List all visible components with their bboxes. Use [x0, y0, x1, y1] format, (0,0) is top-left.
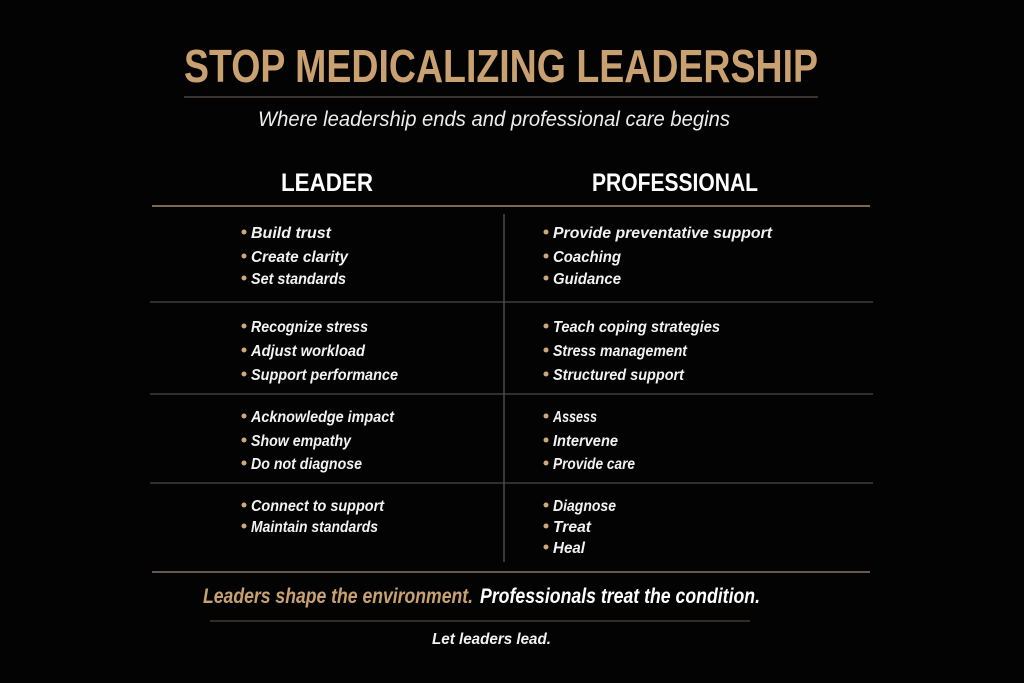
panel: professional items: Teach coping strategies [553, 319, 720, 336]
footer tagline: Let leaders lead. [432, 631, 551, 648]
panel: professional items: Diagnose [553, 498, 616, 515]
panel: professional items: Coaching [553, 249, 621, 266]
panel: leader items [242, 225, 398, 536]
panel: professional items: Treat [553, 519, 592, 536]
panel: leader items: Build trust [251, 225, 332, 242]
panel: leader items: Set standards [251, 271, 346, 288]
panel: leader items: Create clarity [251, 249, 349, 266]
heading: leader: LEADER [281, 169, 373, 197]
callout: summary quote [203, 585, 760, 608]
subtitle: Where leadership ends and professional care begins [258, 108, 730, 131]
panel: leader items: Maintain standards [251, 519, 378, 536]
heading: professional: PROFESSIONAL [592, 169, 758, 197]
panel: leader items: Show empathy [251, 433, 352, 450]
panel: professional items: Assess [552, 409, 597, 426]
callout: summary quote: Professionals treat the condition. [480, 585, 760, 608]
panel: leader items: Recognize stress [251, 319, 368, 336]
title: STOP MEDICALIZING LEADERSHIP [184, 40, 818, 92]
panel: leader items: Do not diagnose [251, 456, 362, 473]
panel: professional items: Intervene [553, 433, 618, 450]
panel: professional items: Heal [553, 540, 586, 557]
panel: professional items: Provide preventative support [553, 225, 773, 242]
panel: leader items: Adjust workload [250, 343, 366, 360]
callout: summary quote: Leaders shape the environment. [203, 585, 473, 608]
panel: professional items: Stress management [553, 343, 688, 360]
panel: professional items: Guidance [553, 271, 621, 288]
panel: leader items: Connect to support [251, 498, 385, 515]
panel: professional items [544, 225, 773, 557]
panel: professional items: Structured support [553, 367, 685, 384]
panel: leader items: Support performance [251, 367, 398, 384]
panel: professional items: Provide care [553, 456, 635, 473]
panel: leader items: Acknowledge impact [250, 409, 395, 426]
